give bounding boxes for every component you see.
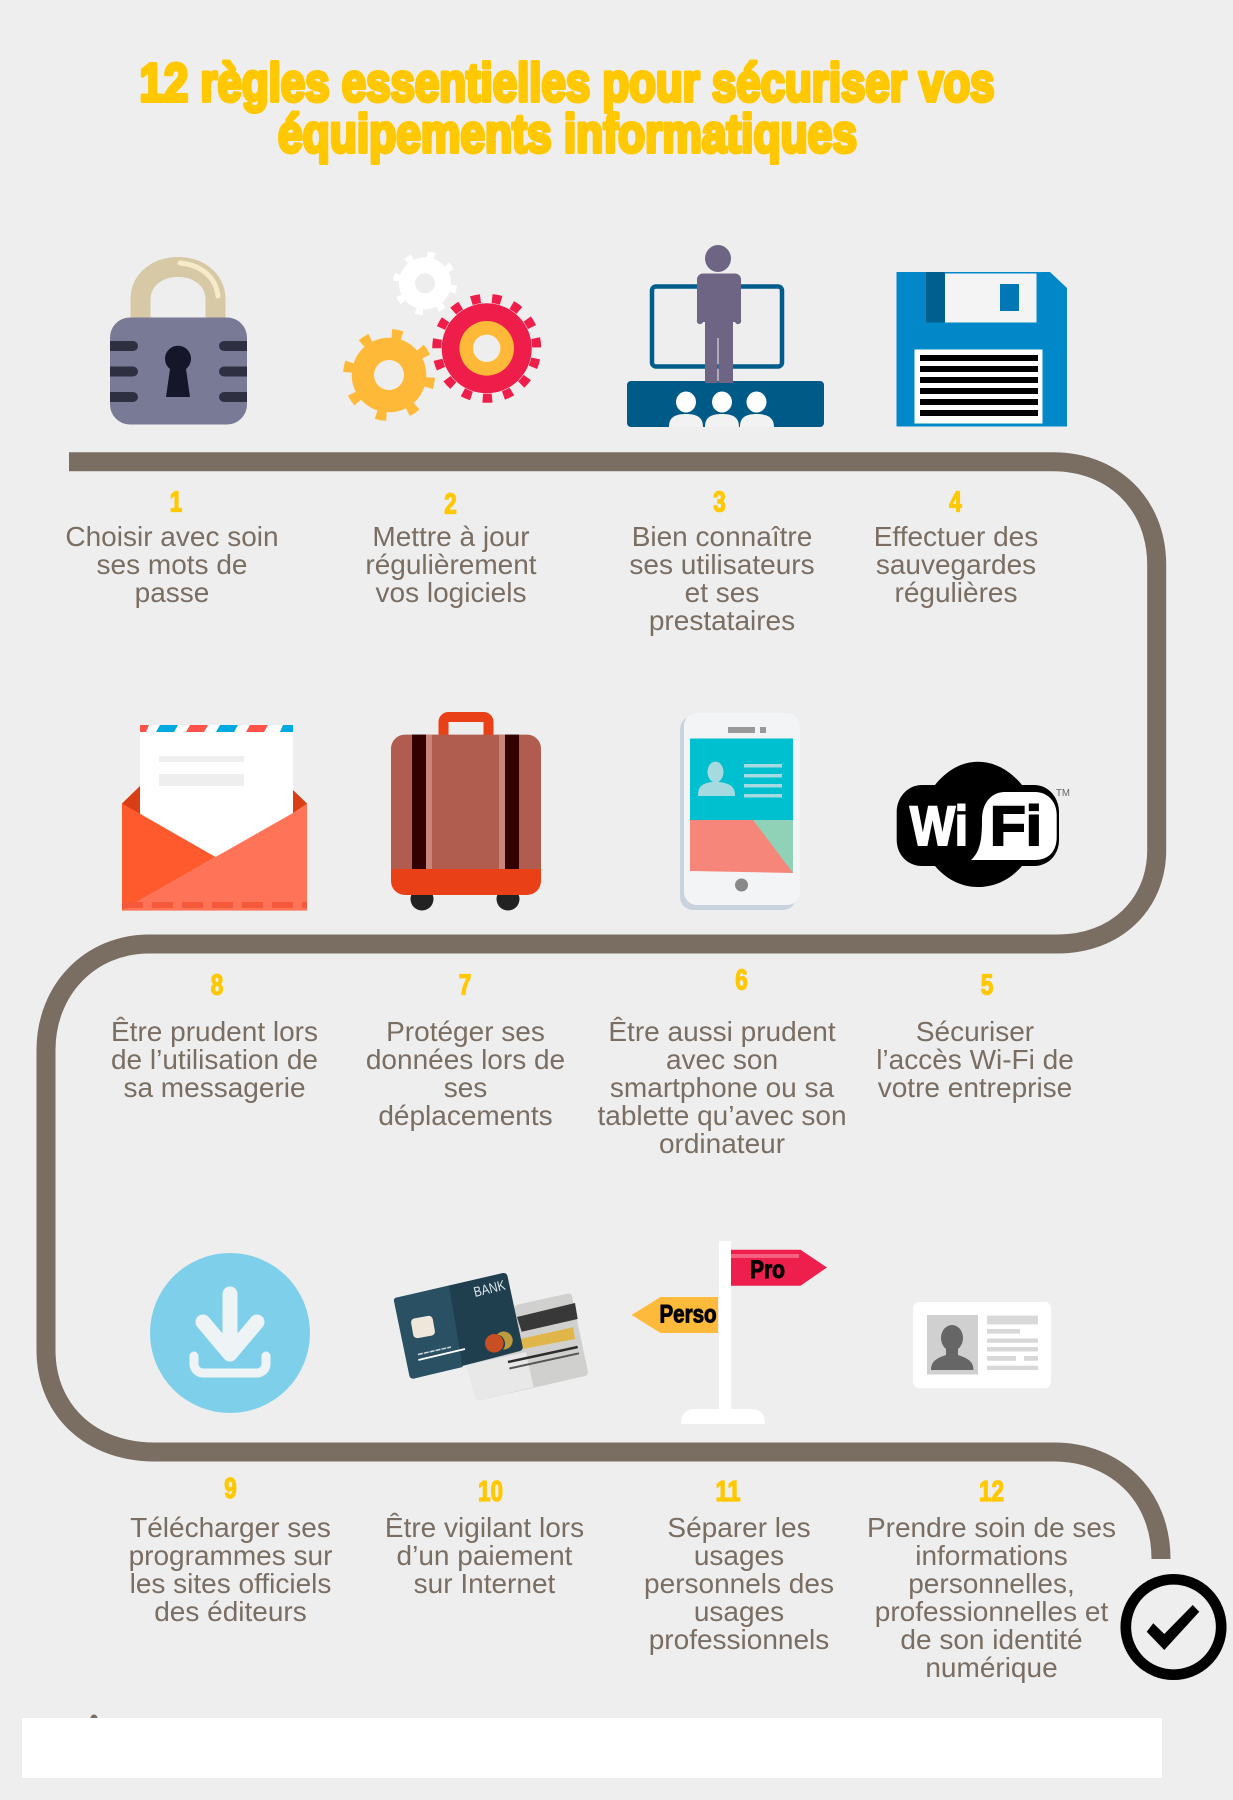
step 9 text: les sites officiels (130, 1568, 331, 1599)
icon: Wi-Fi logo: Fi (990, 794, 1042, 857)
step 5 text: 5 (981, 970, 993, 1002)
step 2 text: Mettre à jour (372, 521, 530, 552)
icon: Wi-Fi logo (897, 762, 1070, 887)
step 1 text: 1 (170, 486, 182, 518)
icon: signpost Pro / Perso: Pro (750, 1256, 785, 1284)
step 4 text: Effectuer des (874, 521, 1038, 552)
step 12 text: professionnelles et (875, 1596, 1108, 1627)
step 11 text: usages (694, 1596, 784, 1627)
step 9 text (129, 1473, 332, 1627)
step 9 text: Télécharger ses (130, 1512, 331, 1543)
step 12 text (867, 1476, 1116, 1683)
step 3 text (629, 486, 815, 636)
step 10 text: 10 (478, 1476, 503, 1508)
icon: signpost Pro / Perso: Perso (660, 1300, 716, 1328)
step 11 text (644, 1476, 834, 1655)
small grey mark above bar (90, 1714, 98, 1719)
step 7 text: données lors de (366, 1044, 565, 1075)
step 6 text: avec son (666, 1044, 778, 1075)
icon: floppy disk (896, 272, 1067, 426)
step 8 text: de l’utilisation de (111, 1044, 318, 1075)
step 6 text: ordinateur (659, 1128, 785, 1159)
step 11 text: usages (694, 1540, 784, 1571)
step 10 text: sur Internet (414, 1568, 556, 1599)
icon: gears (345, 252, 546, 419)
step 1 text: Choisir avec soin (65, 521, 279, 552)
icon: padlock (110, 263, 247, 424)
icon: signpost Pro / Perso (632, 1241, 827, 1424)
step 7 text: 7 (459, 970, 471, 1002)
step 8 text: Être prudent lors (111, 1016, 318, 1047)
step 7 text: déplacements (378, 1100, 553, 1131)
step 2 text: 2 (444, 488, 457, 520)
step 1 text: passe (135, 577, 209, 608)
step 1 text (65, 486, 279, 608)
step 12 text: informations (915, 1540, 1068, 1571)
title: 12 règles essentielles pour sécuriser vos (140, 53, 994, 113)
step 9 text: programmes sur (129, 1540, 332, 1571)
step 10 text (385, 1476, 584, 1599)
step 3 text: prestataires (649, 605, 795, 636)
step 6 text: 6 (735, 964, 748, 996)
icon: bank cards: BANK (472, 1277, 507, 1300)
step 3 text: 3 (713, 486, 726, 518)
step 5 text: votre entreprise (878, 1072, 1072, 1103)
step 2 text: régulièrement (365, 549, 537, 580)
icon: bank cards (394, 1273, 588, 1400)
icon: envelope with letter (122, 725, 307, 911)
step 7 text: Protéger ses (386, 1016, 545, 1047)
step 8 text (111, 970, 318, 1103)
step 11 text: Séparer les (667, 1512, 811, 1543)
step 7 text: ses (444, 1072, 487, 1103)
step 3 text: et ses (685, 577, 759, 608)
step 5 text: l’accès Wi-Fi de (876, 1044, 1074, 1075)
winding path line (46, 462, 1161, 1559)
step 11 text: 11 (716, 1476, 740, 1508)
step 6 text: tablette qu’avec son (597, 1100, 847, 1131)
step 12 text: 12 (979, 1476, 1004, 1508)
step 6 text: smartphone ou sa (610, 1072, 834, 1103)
step 3 text: Bien connaître (632, 521, 812, 552)
icon: suitcase (391, 717, 541, 910)
icon: check mark in circle (1126, 1579, 1221, 1675)
white footer bar (22, 1718, 1162, 1778)
title: équipements informatiques (278, 104, 857, 164)
step 8 text: sa messagerie (123, 1072, 306, 1103)
step 12 text: numérique (925, 1652, 1058, 1683)
step 12 text: de son identité (900, 1624, 1083, 1655)
step 4 text: sauvegardes (876, 549, 1036, 580)
step 12 text: personnelles, (908, 1568, 1075, 1599)
step 4 text: 4 (949, 486, 962, 518)
step 3 text: ses utilisateurs (629, 549, 815, 580)
icon: ID card (913, 1302, 1051, 1388)
step 9 text: des éditeurs (154, 1596, 307, 1627)
step 5 text: Sécuriser (916, 1016, 1034, 1047)
step 6 text: Être aussi prudent (608, 1016, 836, 1047)
icon: Wi-Fi logo: Wi (910, 794, 968, 857)
title (140, 53, 994, 164)
step 10 text: d’un paiement (397, 1540, 573, 1571)
icon: presenter with audience (627, 245, 824, 427)
icon: download (150, 1253, 310, 1413)
step 11 text: professionnels (649, 1624, 829, 1655)
icon: smartphone (680, 713, 800, 910)
step 5 text (876, 970, 1074, 1103)
step 8 text: 8 (211, 970, 223, 1002)
step 2 text: vos logiciels (376, 577, 526, 608)
step 2 text (365, 488, 537, 608)
step 4 text (874, 486, 1038, 608)
step 1 text: ses mots de (97, 549, 247, 580)
step 11 text: personnels des (644, 1568, 834, 1599)
step 6 text (597, 964, 847, 1159)
step 7 text (366, 970, 565, 1131)
step 10 text: Être vigilant lors (385, 1512, 584, 1543)
step 9 text: 9 (224, 1473, 237, 1505)
step 12 text: Prendre soin de ses (867, 1512, 1116, 1543)
step 4 text: régulières (895, 577, 1017, 608)
icon: Wi-Fi logo: TM (1056, 788, 1070, 799)
